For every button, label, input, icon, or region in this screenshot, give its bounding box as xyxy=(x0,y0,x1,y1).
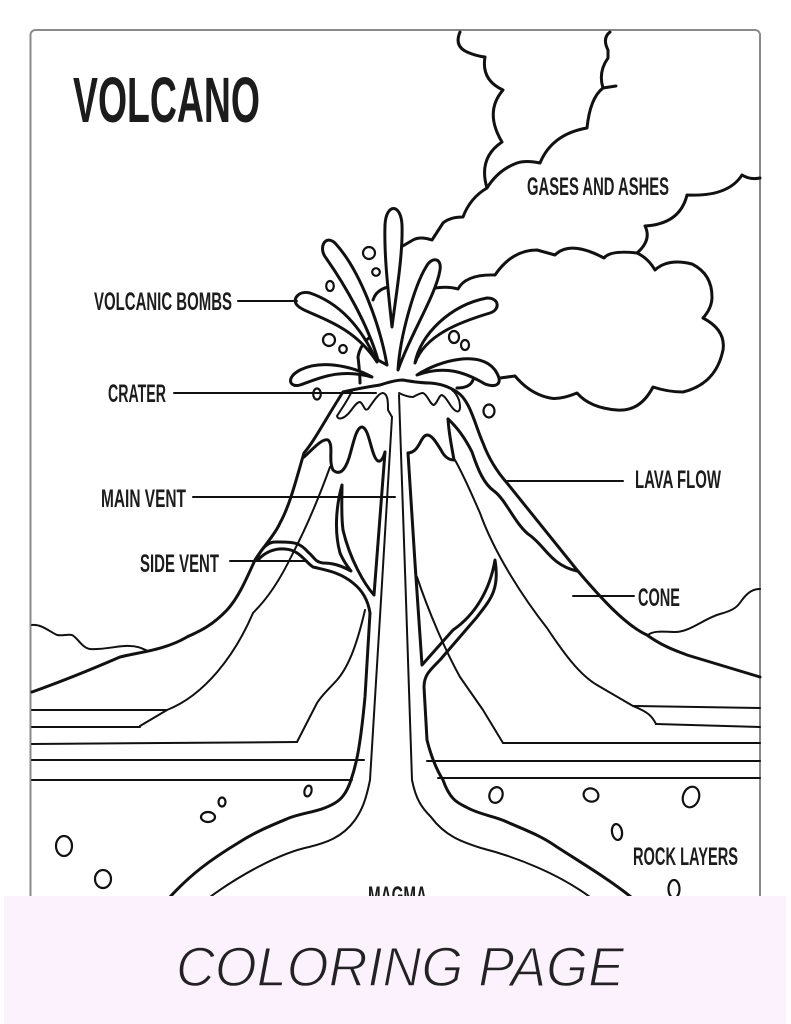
main vent and magma chamber xyxy=(170,395,631,897)
label: side vent: SIDE VENT xyxy=(140,550,219,578)
lava fountain xyxy=(291,208,499,386)
label: cone xyxy=(573,584,680,612)
footer band xyxy=(4,896,786,1024)
jet: centre xyxy=(385,208,402,327)
footer caption: COLORING PAGE xyxy=(176,935,625,998)
label: lava flow: LAVA FLOW xyxy=(635,466,721,494)
crater rim xyxy=(343,380,457,392)
cone outline xyxy=(32,392,760,743)
lava flows xyxy=(304,390,577,571)
jet: lower right xyxy=(417,359,499,386)
rock pebbles xyxy=(56,785,702,898)
jet: middle left xyxy=(295,292,377,362)
label: main vent: MAIN VENT xyxy=(101,485,186,513)
jet: upper left xyxy=(323,240,387,365)
label: volcanic bombs: VOLCANIC BOMBS xyxy=(94,288,232,316)
jet: lower left xyxy=(291,365,372,386)
label: crater: CRATER xyxy=(108,380,166,408)
label: cone: CONE xyxy=(638,584,680,612)
crater smoke xyxy=(358,287,473,388)
jet: middle right xyxy=(415,298,497,363)
rock layer lines xyxy=(32,706,760,780)
jet: upper right xyxy=(398,260,440,370)
label: gases and ashes: GASES AND ASHES xyxy=(527,173,669,201)
volcanic bombs xyxy=(313,247,494,418)
title: VOLCANO xyxy=(73,64,260,136)
background hills xyxy=(32,589,760,651)
ash cloud: gases and ashes xyxy=(401,32,760,410)
label: magma: MAGMA xyxy=(368,882,427,910)
